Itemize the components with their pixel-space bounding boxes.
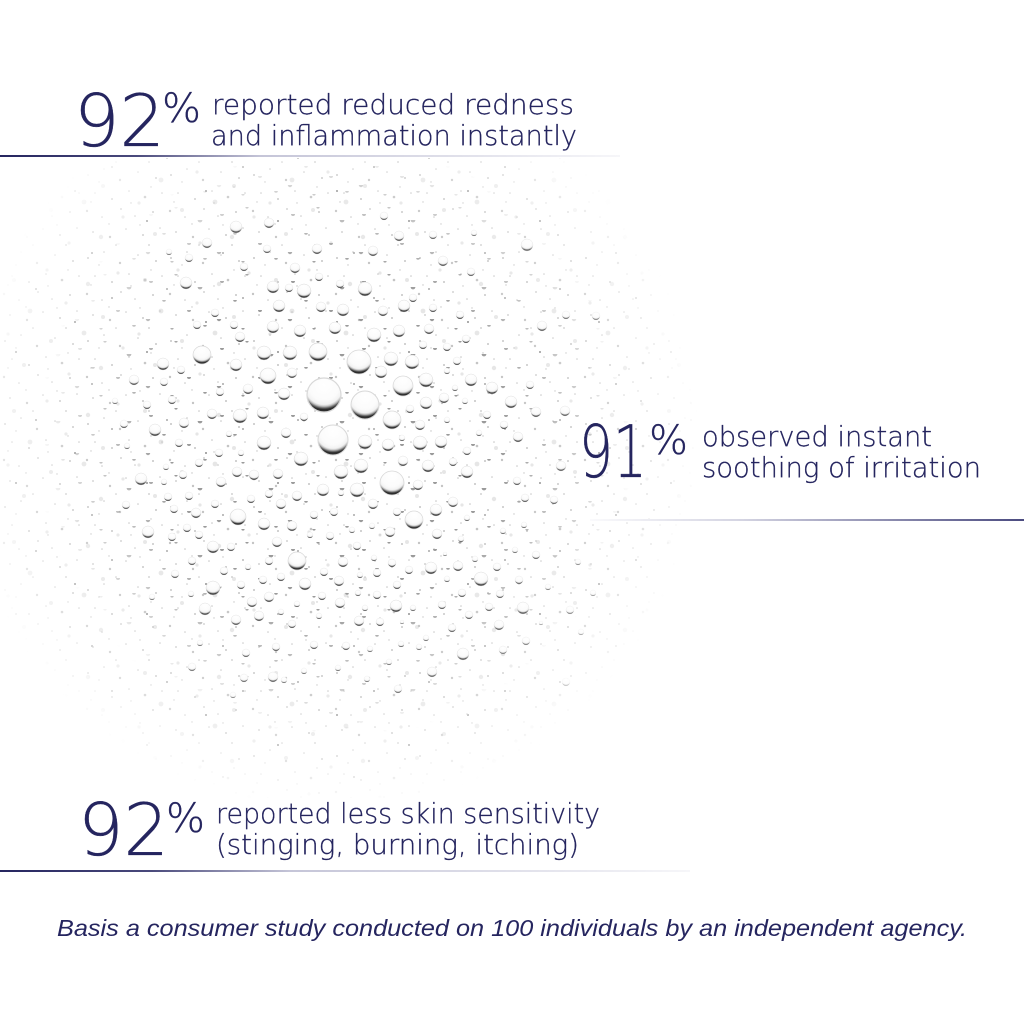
stat: 91% soothing of irritation: % — [649, 418, 688, 464]
stat: 92% less skin sensitivity: % — [166, 796, 205, 842]
stat: 91% soothing of irritation: soothing of irritation — [702, 451, 981, 484]
divider line: bottom stat — [0, 870, 690, 872]
stat: 92% less skin sensitivity — [78, 788, 600, 872]
footnote: Basis a consumer study conducted on 100 individuals by an independent agency. — [57, 915, 967, 941]
stat: 91% soothing of irritation: observed instant — [702, 420, 932, 453]
stat: 92% reduced redness: reported reduced redness — [212, 88, 574, 121]
stat: 91% soothing of irritation — [579, 410, 981, 494]
water droplets texture — [3, 158, 692, 794]
divider line: top stat — [0, 155, 620, 157]
stat: 92% reduced redness: 92 — [74, 79, 165, 163]
divider line: middle stat — [590, 519, 1024, 521]
stat: 91% soothing of irritation: 91 — [579, 410, 647, 494]
stat: 92% reduced redness: % — [162, 86, 201, 132]
stat: 92% reduced redness — [74, 79, 577, 163]
stat: 92% less skin sensitivity: reported less skin sensitivity — [216, 797, 600, 830]
stat: 92% less skin sensitivity: 92 — [78, 788, 169, 872]
stat: 92% reduced redness: and inflammation instantly — [211, 119, 577, 152]
stat: 92% less skin sensitivity: (stinging, burning, itching) — [216, 828, 579, 861]
